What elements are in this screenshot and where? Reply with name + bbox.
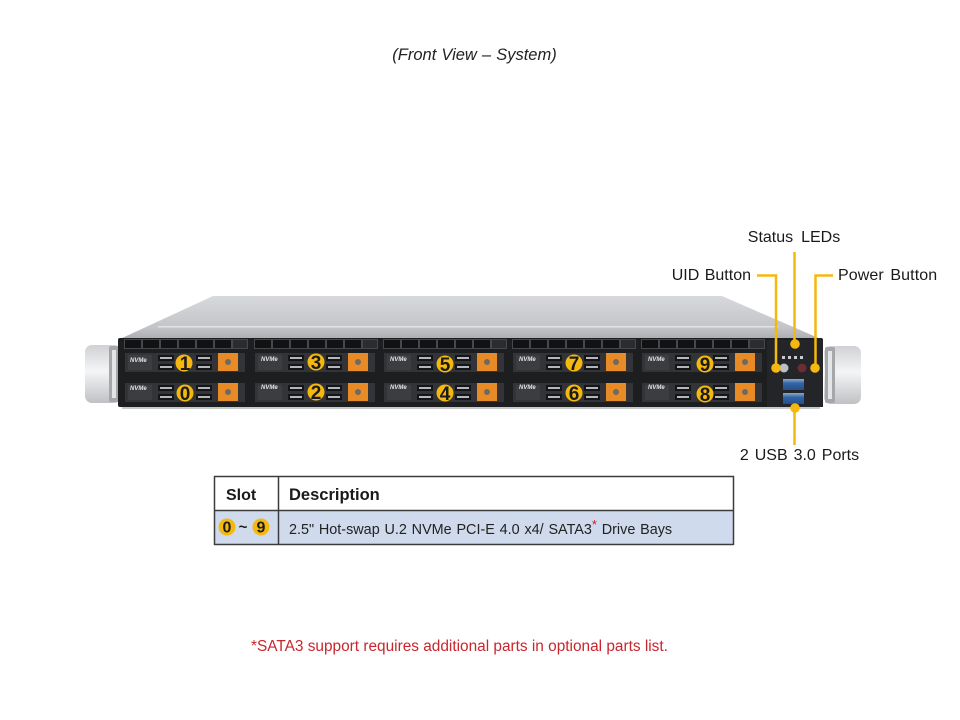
chassis front face	[118, 338, 823, 407]
slot range badges	[218, 518, 270, 536]
table row background	[214, 511, 733, 545]
table borders	[214, 476, 734, 545]
air vents	[124, 339, 765, 349]
drive bays	[123, 350, 764, 405]
slot number badges: 2	[311, 383, 321, 404]
USB port top	[783, 379, 804, 390]
NVMe bay labels: NVMe	[519, 357, 536, 363]
NVMe bay labels: NVMe	[390, 357, 407, 363]
callout: status LEDs: Status LEDs	[748, 229, 840, 246]
USB port bottom	[783, 393, 804, 404]
left rack handle	[85, 345, 121, 403]
control panel	[767, 340, 823, 407]
slot table	[214, 476, 734, 545]
callout: power button: Power Button	[838, 267, 937, 284]
slot number badges: 7	[569, 354, 579, 375]
row description: Drive Bays	[597, 522, 672, 538]
UID button	[780, 364, 788, 372]
slot number badges: 9	[700, 355, 710, 376]
power button	[798, 364, 806, 372]
header: description: Description	[289, 486, 380, 504]
callout: UID button: UID Button	[672, 267, 751, 284]
slot number badges: 6	[569, 384, 579, 405]
NVMe bay labels: NVMe	[648, 357, 665, 363]
row description: 2.5" Hot-swap U.2 NVMe PCI-E 4.0 x4/ SATA3	[289, 522, 592, 538]
title: (Front View – System)	[392, 46, 557, 64]
slot range badges: ~	[239, 519, 248, 536]
callout: USB ports: 2 USB 3.0 Ports	[740, 447, 859, 464]
slot number badges: 1	[180, 354, 191, 375]
NVMe bay labels	[130, 357, 665, 392]
NVMe bay labels: NVMe	[261, 357, 278, 363]
slot number badges	[176, 353, 714, 406]
footnote: *SATA3 support requires additional parts in optional parts list.	[251, 638, 668, 655]
NVMe bay labels: NVMe	[648, 385, 665, 391]
right rack handle	[824, 346, 861, 404]
callout: USB ports	[740, 403, 859, 464]
slot number badges: 4	[440, 384, 451, 405]
row description: *	[592, 517, 597, 532]
server chassis	[85, 296, 861, 409]
slot number badges: 0	[180, 384, 190, 405]
NVMe bay labels: NVMe	[130, 386, 147, 392]
slot number badges: 3	[311, 353, 321, 374]
slot number badges: 5	[440, 355, 451, 376]
NVMe bay labels: NVMe	[130, 358, 147, 364]
header: slot: Slot	[226, 487, 257, 504]
slot range badges: 9	[257, 520, 266, 536]
NVMe bay labels: NVMe	[261, 385, 278, 391]
chassis top cover	[122, 296, 823, 340]
callout: status LEDs	[748, 229, 840, 349]
callout: UID button	[672, 267, 781, 373]
slot number badges: 8	[700, 385, 710, 406]
slot range badges: 0	[223, 520, 232, 536]
NVMe bay labels: NVMe	[390, 385, 407, 391]
callout: power button	[810, 267, 937, 373]
status LED icons	[782, 356, 803, 359]
NVMe bay labels: NVMe	[519, 385, 536, 391]
